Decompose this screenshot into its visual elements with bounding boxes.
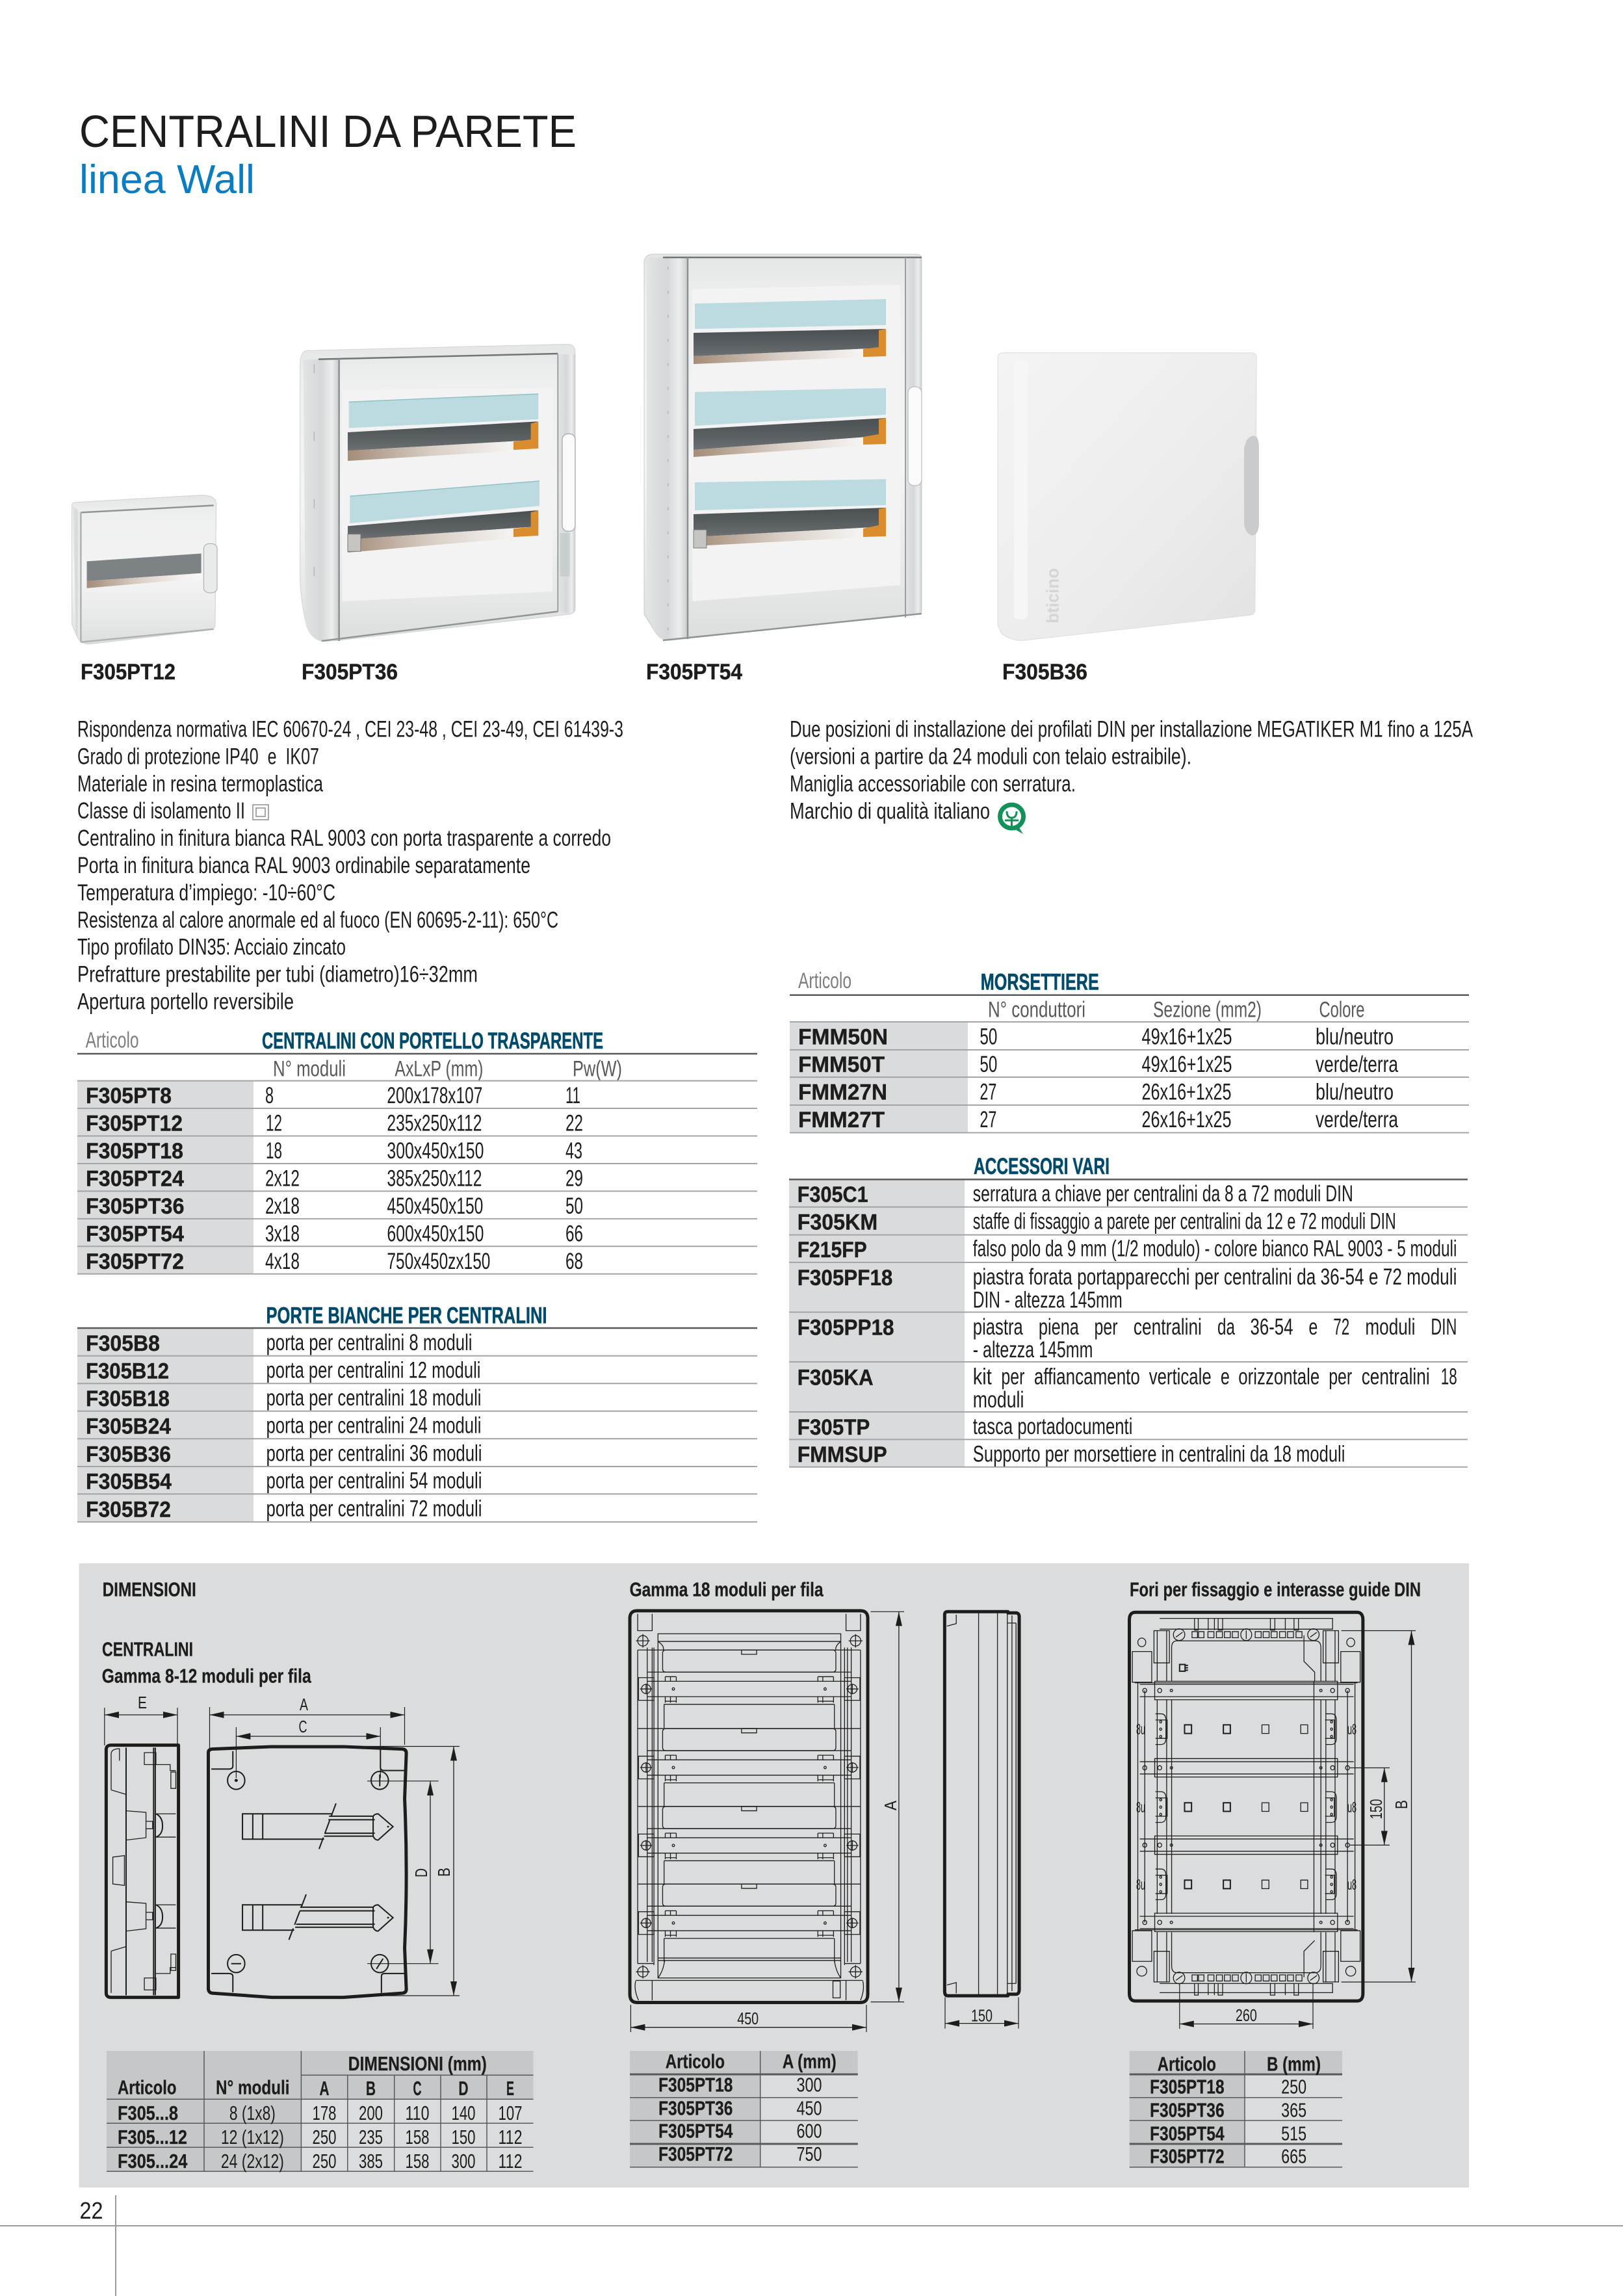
drawing: side view 18 modules bbox=[944, 1611, 1019, 2029]
table: B fixing distances: 515 bbox=[1281, 2122, 1306, 2145]
row F305PP18: moduli bbox=[1365, 1314, 1415, 1340]
dimension D: D bbox=[411, 1868, 431, 1877]
row F305...8: 140 bbox=[451, 2102, 476, 2124]
row F305...8: 107 bbox=[498, 2102, 523, 2124]
product: F305PT12 bbox=[72, 495, 217, 644]
row F305...24: 112 bbox=[498, 2150, 523, 2172]
labels 8u: 8u bbox=[1136, 1799, 1145, 1816]
row F305PT8: 8 bbox=[265, 1083, 274, 1108]
row F305B36: F305B36 bbox=[86, 1442, 171, 1467]
table: A heights: 750 bbox=[797, 2143, 822, 2165]
row F305C1: serratura a chiave per centralini da 8 a 72 moduli DIN bbox=[973, 1181, 1353, 1207]
dimension E: E bbox=[138, 1693, 147, 1712]
row F305PP18 bbox=[798, 1314, 1457, 1363]
row F305PT54: 66 bbox=[565, 1221, 583, 1247]
row F305PP18: piastra bbox=[973, 1314, 1023, 1340]
labels 8u: u8 bbox=[1347, 1721, 1357, 1738]
subtitle: linea Wall bbox=[79, 157, 255, 202]
row F305PT18: 18 bbox=[266, 1138, 282, 1164]
row F305B36: porta per centralini 36 moduli bbox=[266, 1441, 482, 1466]
dimension A height: A bbox=[881, 1800, 900, 1810]
row F305...12: 150 bbox=[451, 2126, 476, 2148]
row F305PT54: 3x18 bbox=[265, 1221, 300, 1247]
dimension 150 rail spacing: 150 bbox=[1366, 1799, 1386, 1819]
table: morsettiere: Articolo bbox=[798, 969, 851, 993]
row F305KA: per bbox=[1001, 1364, 1025, 1390]
row F305PT12 bbox=[86, 1110, 583, 1136]
row F305B72 bbox=[86, 1496, 482, 1522]
table: dimensioni 8-24 modules: D bbox=[459, 2077, 468, 2100]
table: B fixing distances: 250 bbox=[1281, 2076, 1306, 2098]
panel: dimensioni bbox=[79, 1563, 1469, 2187]
row F305KA: orizzontale bbox=[1238, 1364, 1319, 1390]
row F305B24 bbox=[86, 1413, 481, 1439]
table: B fixing distances: B (mm) bbox=[1267, 2053, 1321, 2076]
dimension E bbox=[105, 1693, 177, 1745]
row FMM50T: verde/terra bbox=[1316, 1052, 1398, 1077]
row F305PT8: F305PT8 bbox=[86, 1084, 172, 1108]
heading: ACCESSORI VARI bbox=[974, 1154, 1110, 1179]
row F305PP18: e bbox=[1308, 1314, 1318, 1340]
row F215FP: F215FP bbox=[798, 1238, 867, 1262]
row F305PT54: 600x450x150 bbox=[387, 1221, 484, 1247]
row F305PT54 bbox=[86, 1221, 583, 1247]
row F305PT18: 300x450x150 bbox=[387, 1138, 484, 1164]
row F305PF18: DIN - altezza 145mm bbox=[973, 1287, 1123, 1313]
row F305KA: F305KA bbox=[798, 1365, 874, 1390]
table: centralini con portello trasparente: N° moduli bbox=[273, 1057, 346, 1082]
row FMM27N bbox=[798, 1079, 1394, 1105]
dimension 260: 260 bbox=[1236, 2005, 1257, 2025]
label: F305PT12: F305PT12 bbox=[81, 660, 175, 685]
row F305PT24 bbox=[86, 1166, 583, 1191]
text block: specifications right: (versioni a partire da 24 moduli con telaio estraibile). bbox=[790, 744, 1191, 770]
row F305PP18: da bbox=[1217, 1314, 1235, 1340]
row F305KA: 18 bbox=[1441, 1364, 1457, 1390]
row F305TP: tasca portadocumenti bbox=[973, 1414, 1132, 1439]
row F305KM: F305KM bbox=[798, 1210, 877, 1235]
row F305B54 bbox=[86, 1468, 482, 1494]
row F305PP18: F305PP18 bbox=[798, 1316, 894, 1340]
row F305PT36 bbox=[86, 1194, 583, 1219]
text block: specifications left: Temperatura d’impiego: -10÷60°C bbox=[77, 880, 335, 906]
labels 8u bbox=[1136, 1721, 1357, 1893]
row F305PT8: 11 bbox=[565, 1083, 580, 1108]
row F305...12: F305...12 bbox=[118, 2126, 187, 2148]
table: A heights: F305PT54 bbox=[658, 2119, 733, 2142]
row F305C1 bbox=[798, 1181, 1353, 1207]
table: B fixing distances: 365 bbox=[1281, 2099, 1306, 2122]
row F305PT12: 235x250x112 bbox=[387, 1110, 482, 1136]
row F305B18: porta per centralini 18 moduli bbox=[266, 1385, 481, 1411]
labels 8u: u8 bbox=[1347, 1876, 1357, 1893]
row FMM50N: 50 bbox=[980, 1024, 997, 1049]
row F305B12: porta per centralini 12 moduli bbox=[266, 1358, 481, 1383]
dimension 450: 450 bbox=[737, 2009, 759, 2028]
dimension A: A bbox=[300, 1695, 308, 1714]
table: morsettiere: N° conduttori bbox=[988, 997, 1085, 1022]
table: dimensioni 8-24 modules: N° moduli bbox=[216, 2076, 290, 2099]
row F305...24: 250 bbox=[312, 2150, 337, 2172]
dimension 150 rail spacing bbox=[1350, 1768, 1390, 1845]
row FMM50T: FMM50T bbox=[798, 1052, 885, 1077]
row F305B8 bbox=[86, 1330, 472, 1356]
row F305PP18: centralini bbox=[1134, 1314, 1202, 1340]
row F305KA: moduli bbox=[973, 1387, 1024, 1413]
row F305PT54: F305PT54 bbox=[86, 1222, 184, 1247]
row FMM27T: verde/terra bbox=[1316, 1107, 1398, 1132]
row F305B18 bbox=[86, 1385, 481, 1411]
table: dimensioni 8-24 modules bbox=[107, 2051, 533, 2172]
row F305B72: F305B72 bbox=[86, 1498, 171, 1522]
product: F305B36 bbox=[998, 353, 1259, 640]
dimension B: B bbox=[434, 1868, 454, 1877]
table: A heights: 450 bbox=[797, 2096, 822, 2119]
row F305...24: 385 bbox=[359, 2150, 383, 2172]
table: A heights: 300 bbox=[797, 2074, 822, 2096]
dimension 150: 150 bbox=[971, 2005, 993, 2025]
row FMM27T: 26x16+1x25 bbox=[1141, 1107, 1231, 1132]
table: B fixing distances: 665 bbox=[1281, 2145, 1306, 2168]
row F305B8: F305B8 bbox=[86, 1331, 160, 1356]
row F305PT24: F305PT24 bbox=[86, 1166, 184, 1191]
row F305PT8 bbox=[86, 1083, 580, 1108]
row F305PT72: F305PT72 bbox=[86, 1249, 184, 1274]
row F305PP18: 36-54 bbox=[1251, 1314, 1293, 1340]
label: F305B36: F305B36 bbox=[1002, 660, 1087, 685]
text block: specifications left: Classe di isolamento II bbox=[77, 798, 245, 824]
table: porte bianche per centralini bbox=[77, 1303, 757, 1522]
row FMM27T: FMM27T bbox=[798, 1108, 885, 1132]
row F305...12: 235 bbox=[359, 2126, 383, 2148]
row FMMSUP bbox=[798, 1442, 1345, 1467]
row F305B24: porta per centralini 24 moduli bbox=[266, 1413, 481, 1439]
row F305B18: F305B18 bbox=[86, 1387, 170, 1411]
table: centralini con portello trasparente: Pw(W) bbox=[573, 1057, 622, 1082]
title line: CENTRALINI DA PARETE bbox=[79, 106, 577, 157]
row FMM50N: blu/neutro bbox=[1316, 1024, 1394, 1049]
row F305KA: e bbox=[1221, 1364, 1230, 1390]
row F305PT18: F305PT18 bbox=[86, 1139, 183, 1164]
heading: centralini: CENTRALINI bbox=[102, 1638, 193, 1660]
text block: specifications left: Materiale in resina termoplastica bbox=[77, 771, 323, 796]
table: A heights: Articolo bbox=[666, 2050, 725, 2073]
row F305PT36: 2x18 bbox=[265, 1194, 300, 1219]
text block: specifications right: Maniglia accessoriabile con serratura. bbox=[790, 771, 1076, 797]
footer: page number and rules bbox=[0, 2195, 1623, 2296]
row F305KA: affiancamento bbox=[1034, 1364, 1140, 1390]
row FMM50N: FMM50N bbox=[798, 1024, 888, 1049]
row F305...12: 12 (1x12) bbox=[221, 2126, 284, 2148]
text block: specifications left bbox=[77, 716, 623, 1014]
row F305PT24: 2x12 bbox=[265, 1166, 300, 1191]
labels 8u: u8 bbox=[1347, 1799, 1357, 1816]
text block: specifications right: Marchio di qualità italiano bbox=[790, 798, 990, 824]
table: B fixing distances: F305PT54 bbox=[1150, 2122, 1225, 2145]
row F215FP bbox=[798, 1236, 1457, 1262]
row F305B8: porta per centralini 8 moduli bbox=[266, 1330, 472, 1355]
row FMM50N bbox=[798, 1024, 1394, 1049]
row F305C1: F305C1 bbox=[798, 1182, 868, 1207]
row F305...8: 200 bbox=[359, 2102, 383, 2124]
table: dimensioni 8-24 modules: Articolo bbox=[118, 2076, 177, 2099]
text block: specifications left: Centralino in finitura bianca RAL 9003 con porta trasparente a corredo bbox=[77, 826, 611, 851]
row F305B54: F305B54 bbox=[86, 1470, 172, 1494]
table: A heights: A (mm) bbox=[783, 2050, 837, 2073]
table: A heights bbox=[630, 2050, 858, 2167]
row F305...12: 250 bbox=[312, 2126, 337, 2148]
table: centralini con portello trasparente: Articolo bbox=[86, 1028, 139, 1053]
row F305...8 bbox=[118, 2102, 523, 2124]
row F305PT36: F305PT36 bbox=[86, 1194, 185, 1219]
icon: Italian quality mark bbox=[1000, 805, 1023, 834]
product: F305PT54 bbox=[644, 254, 922, 640]
heading: CENTRALINI CON PORTELLO TRASPARENTE bbox=[262, 1028, 603, 1054]
product: F305PT36 bbox=[300, 344, 575, 642]
heading: fori per fissaggio: Fori per fissaggio e interasse guide DIN bbox=[1130, 1578, 1421, 1600]
row F305PP18: 72 bbox=[1333, 1314, 1349, 1340]
drawing: side view 8-12 modules bbox=[105, 1693, 179, 1998]
row F305...8: 110 bbox=[406, 2102, 429, 2124]
table: A heights: F305PT72 bbox=[658, 2143, 733, 2165]
table: B fixing distances: F305PT36 bbox=[1150, 2099, 1225, 2122]
heading: dimensioni: DIMENSIONI bbox=[103, 1578, 196, 1600]
row F305PT24: 29 bbox=[565, 1166, 583, 1191]
row F305KM bbox=[798, 1209, 1396, 1235]
table: accessori vari bbox=[789, 1154, 1468, 1467]
dimension C: C bbox=[299, 1717, 307, 1736]
heading: gamma 18: Gamma 18 moduli per fila bbox=[630, 1578, 824, 1600]
row FMMSUP: FMMSUP bbox=[798, 1442, 887, 1467]
row F305...8: F305...8 bbox=[118, 2102, 178, 2124]
dimension 150 bbox=[945, 1997, 1019, 2029]
row F305...24: 24 (2x12) bbox=[221, 2150, 284, 2172]
row FMM27N: 26x16+1x25 bbox=[1141, 1079, 1231, 1105]
table: B fixing distances bbox=[1130, 2051, 1342, 2168]
row F305...8: 8 (1x8) bbox=[229, 2102, 276, 2124]
row F305KA: verticale bbox=[1149, 1364, 1212, 1390]
dimension B rail: B bbox=[1392, 1800, 1411, 1809]
label: F305PT54: F305PT54 bbox=[646, 660, 742, 685]
table: morsettiere bbox=[790, 969, 1469, 1132]
row F305...24: 158 bbox=[406, 2150, 429, 2172]
text block: specifications left: Porta in finitura bianca RAL 9003 ordinabile separatamente bbox=[77, 853, 530, 878]
table: B fixing distances: F305PT72 bbox=[1150, 2145, 1225, 2168]
row F305PP18: per bbox=[1095, 1314, 1118, 1340]
row F305KA bbox=[798, 1364, 1457, 1413]
text block: specifications left: Resistenza al calore anormale ed al fuoco (EN 60695-2-11): 650°C bbox=[77, 907, 558, 933]
row F305...24 bbox=[118, 2150, 523, 2172]
row F305B54: porta per centralini 54 moduli bbox=[266, 1468, 482, 1494]
text block: specifications right bbox=[790, 716, 1473, 834]
label: F305PT36: F305PT36 bbox=[302, 660, 398, 685]
table: morsettiere: Sezione (mm2) bbox=[1153, 997, 1262, 1022]
table: morsettiere: Colore bbox=[1319, 997, 1365, 1022]
row F305...24: F305...24 bbox=[118, 2150, 188, 2172]
drawing: front view 18 modules bbox=[630, 1611, 904, 2032]
labels 8u: 8u bbox=[1136, 1876, 1145, 1893]
row FMMSUP: Supporto per morsettiere in centralini da 18 moduli bbox=[973, 1442, 1345, 1467]
row F305B12 bbox=[86, 1358, 481, 1384]
row FMM50T: 50 bbox=[980, 1052, 997, 1077]
row F305PT72: 68 bbox=[565, 1249, 583, 1274]
row F305KA: kit bbox=[973, 1364, 992, 1390]
row F305PT12: F305PT12 bbox=[86, 1112, 183, 1136]
row F305PT24: 385x250x112 bbox=[387, 1166, 482, 1191]
row F305PT18 bbox=[86, 1138, 582, 1164]
row F305PT36: 450x450x150 bbox=[387, 1194, 483, 1219]
labels 8u: 8u bbox=[1136, 1721, 1145, 1738]
text block: specifications left: Tipo profilato DIN35: Acciaio zincato bbox=[77, 935, 346, 960]
table: dimensioni 8-24 modules: B bbox=[366, 2077, 376, 2100]
drawing: fixing holes and DIN rails bbox=[1130, 1612, 1416, 2029]
row F305PT72: 750x450zx150 bbox=[387, 1249, 490, 1274]
row F305PF18 bbox=[798, 1264, 1457, 1313]
table: centralini con portello trasparente bbox=[77, 1028, 757, 1274]
row F305PT18: 43 bbox=[565, 1138, 582, 1164]
panel: product photos bbox=[72, 254, 1259, 644]
drawing: front view 8-12 modules bbox=[209, 1695, 460, 1998]
table: centralini con portello trasparente: AxLxP (mm) bbox=[395, 1057, 483, 1082]
table: dimensioni 8-24 modules: C bbox=[413, 2077, 421, 2100]
row F305PP18: piena bbox=[1039, 1314, 1079, 1340]
row F305KA: centralini bbox=[1362, 1364, 1430, 1390]
row FMM27T: 27 bbox=[980, 1107, 996, 1132]
row F305...8: 178 bbox=[312, 2102, 337, 2124]
text block: specifications left: Rispondenza normativa IEC 60670-24 , CEI 23-48 , CEI 23-49, CEI 61439-3 bbox=[77, 716, 623, 742]
table: dimensioni 8-24 modules: DIMENSIONI (mm) bbox=[348, 2052, 487, 2075]
table: A heights: 600 bbox=[797, 2119, 822, 2142]
text block: specifications left: Apertura portello reversibile bbox=[77, 989, 294, 1014]
row F305PP18: DIN bbox=[1431, 1314, 1457, 1340]
row FMM50T: 49x16+1x25 bbox=[1141, 1052, 1232, 1077]
row F305...12 bbox=[118, 2126, 523, 2148]
text block: specifications left: Prefratture prestabilite per tubi (diametro)16÷32mm bbox=[77, 962, 478, 987]
row F305KM: staffe di fissaggio a parete per centralini da 12 e 72 moduli DIN bbox=[973, 1209, 1396, 1234]
row F305PT72: 4x18 bbox=[265, 1249, 300, 1274]
icon: class II insulation bbox=[253, 805, 268, 820]
row F305PT8: 200x178x107 bbox=[387, 1083, 482, 1108]
row F305B72: porta per centralini 72 moduli bbox=[266, 1496, 482, 1522]
row FMM27N: blu/neutro bbox=[1316, 1079, 1394, 1105]
table: dimensioni 8-24 modules: E bbox=[506, 2077, 514, 2100]
table: A heights: F305PT18 bbox=[658, 2074, 733, 2096]
heading: gamma 8-12: Gamma 8-12 moduli per fila bbox=[102, 1664, 311, 1688]
row F305B24: F305B24 bbox=[86, 1415, 171, 1439]
heading: MORSETTIERE bbox=[981, 970, 1099, 995]
heading: PORTE BIANCHE PER CENTRALINI bbox=[266, 1303, 547, 1329]
row FMM50N: 49x16+1x25 bbox=[1141, 1024, 1232, 1049]
product labels bbox=[81, 660, 1087, 685]
row FMM27N: FMM27N bbox=[798, 1080, 887, 1105]
table: dimensioni 8-24 modules: A bbox=[320, 2077, 329, 2100]
row F305...12: 112 bbox=[498, 2126, 523, 2148]
row F305TP: F305TP bbox=[798, 1415, 870, 1440]
row F305B36 bbox=[86, 1441, 482, 1467]
row F305PT12: 12 bbox=[266, 1110, 282, 1136]
row FMM50T bbox=[798, 1052, 1398, 1077]
product: F305B36: bticino bbox=[1045, 568, 1063, 623]
row F305...12: 158 bbox=[406, 2126, 429, 2148]
row F305PT36: 50 bbox=[565, 1194, 583, 1219]
row F305PT12: 22 bbox=[565, 1110, 583, 1136]
row F305TP bbox=[798, 1414, 1132, 1440]
row F305KA: per bbox=[1329, 1364, 1352, 1390]
row F305PF18: F305PF18 bbox=[798, 1266, 892, 1290]
title bbox=[79, 106, 577, 202]
table: B fixing distances: F305PT18 bbox=[1150, 2076, 1225, 2098]
row F305PT72 bbox=[86, 1249, 583, 1274]
table: A heights: F305PT36 bbox=[658, 2096, 733, 2119]
page number: 22 bbox=[79, 2197, 103, 2224]
row FMM27T bbox=[798, 1107, 1398, 1132]
row F305...24: 300 bbox=[451, 2150, 476, 2172]
text block: specifications left: Grado di protezione IP40 e IK07 bbox=[77, 744, 319, 769]
row F305B12: F305B12 bbox=[86, 1359, 169, 1384]
row FMM27N: 27 bbox=[980, 1079, 996, 1105]
row F305PP18: - altezza 145mm bbox=[973, 1337, 1093, 1363]
row F305PF18: piastra forata portapparecchi per centralini da 36-54 e 72 moduli bbox=[973, 1264, 1457, 1290]
table: B fixing distances: Articolo bbox=[1158, 2053, 1216, 2076]
